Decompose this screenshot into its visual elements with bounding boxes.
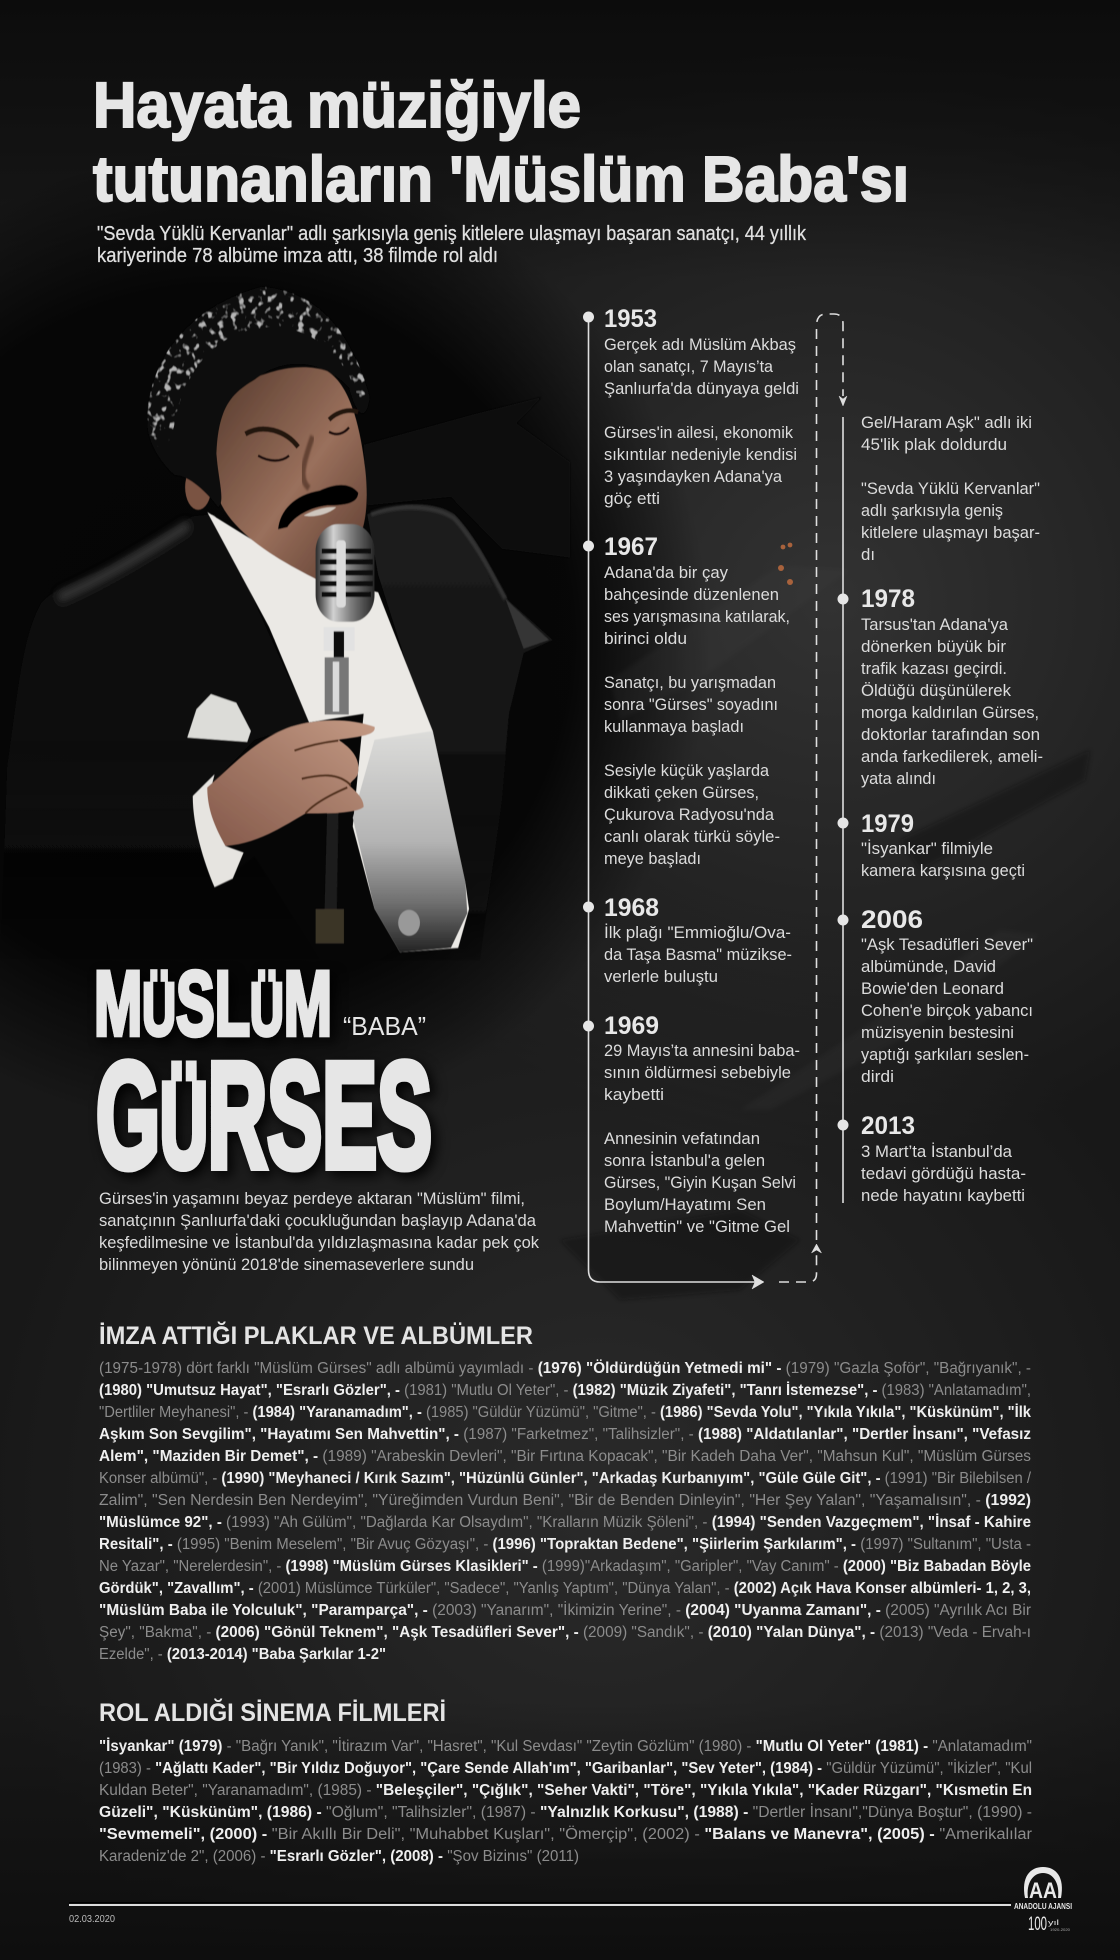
- timeline entry 1967: Çukurova Radyosu'nda: [604, 805, 775, 824]
- subtitle: "Sevda Yüklü Kervanlar" adlı şarkısıyla geniş kitlelere ulaşmayı başaran sanatçı, 44 yıllık: [97, 223, 807, 245]
- Anadolu Ajansı logo: 100: [1028, 1914, 1047, 1935]
- albums text block: (1975-1978) dört farklı "Müslüm Gürses" adlı albümü yayımladı - (1976) "Öldürdüğün Yetmedi mi" - (1979) "Gazla Şoför", "Bağrıyanık", -: [99, 1360, 1031, 1377]
- icon: AA arch: [1024, 1867, 1062, 1898]
- film description: [99, 1189, 539, 1274]
- shirt cuff: [193, 774, 244, 887]
- timeline entry 1979: "İsyankar" filmiyle: [861, 839, 993, 858]
- albums text block: Ezelde", - (2013-2014) "Baba Şarkılar 1-2": [99, 1646, 386, 1663]
- mic stand: [324, 731, 340, 944]
- timeline entry 2006: Cohen'e birçok yabancı: [861, 1001, 1033, 1020]
- timeline entry 2006: yaptığı şarkıları seslen-: [861, 1045, 1029, 1064]
- timeline entry 2006: [838, 906, 1033, 1086]
- timeline entry 1979: 1979: [861, 810, 914, 838]
- timeline entry 2013: [838, 1112, 1026, 1205]
- timeline entry 1969: dı: [861, 545, 875, 564]
- name: Müslüm Baba Gürses: [94, 953, 432, 1199]
- albums text block: "Müslümce 92", - (1993) "Ah Gülüm", "Dağlarda Kar Olsaydım", "Kralların Müzik Şöleni", - (1994) "Senden Vazgeçmem", "İnsaf - Kahire: [99, 1514, 1031, 1531]
- timeline entry 1978: doktorlar tarafından son: [861, 725, 1040, 744]
- timeline entry 2013: 2013: [861, 1112, 915, 1140]
- timeline entry 1969: [583, 413, 1040, 1236]
- title: [93, 69, 909, 215]
- timeline entry 1953: sıkıntılar nedeniyle kendisi: [604, 445, 797, 464]
- timeline entry 2013: tedavi gördüğü hasta-: [861, 1164, 1026, 1183]
- timeline entry 1967: birinci oldu: [604, 629, 687, 648]
- Anadolu Ajansı logo: AA: [1029, 1878, 1057, 1903]
- timeline entry 2013: 3 Mart’ta İstanbul’da: [861, 1142, 1013, 1161]
- timeline entry 1967: bahçesinde düzenlenen: [604, 585, 779, 604]
- ear: [185, 465, 211, 510]
- Anadolu Ajansı logo: [1014, 1867, 1072, 1935]
- timeline entry 1969: 1969: [604, 1012, 659, 1040]
- shirt: [207, 512, 469, 952]
- timeline entry 1968: verlerle buluştu: [604, 967, 718, 986]
- timeline entry 1967: sonra "Gürses" soyadını: [604, 695, 778, 714]
- albums text block: "Müslüm Baba ile Yolculuk", "Paramparça", - (2003) "Yanarım", "İkimizin Yerine", - (2004) "Uyanma Zamanı", - (2005) "Ayrılık Acı Bir: [99, 1601, 1031, 1619]
- albums text block: Şey", "Bakma", - (2006) "Gönül Teknem", "Aşk Tesadüfleri Sever", - (2009) "Sandık", - (2010) "Yalan Dünya", - (2013) "Veda - Ervah-ı: [99, 1624, 1031, 1641]
- timeline entry 1953: 3 yaşındayken Adana'ya: [604, 467, 783, 486]
- timeline entry 1953: [583, 305, 799, 508]
- albums text block: Resitali", - (1995) "Benim Meselem", "Bir Avuç Gözyaşı", - (1996) "Topraktan Bedene", "Şiirlerim Şarkılarım", - (1997) "Sultanım", "Usta -: [99, 1536, 1031, 1553]
- timeline entry 2013: nede hayatını kaybetti: [861, 1186, 1025, 1205]
- films text block: Karadeniz'de 2", (2006) - "Esrarlı Gözler", (2008) - "Şov Bizinıs" (2011): [99, 1848, 579, 1865]
- films text block: Kuldan Beter", "Yaranamadım", (1985) - "Beleşçiler", "Çığlık", "Seher Vakti", "Töre", "Yıkıla Yıkıla", "Kader Rüzgarı", "Kısmetin En: [99, 1782, 1032, 1799]
- timeline entry 1967: canlı olarak türkü söyle-: [604, 827, 780, 846]
- portrait of Müslüm Gürses singing: [0, 287, 570, 960]
- timeline entry 2006: "Aşk Tesadüfleri Sever": [861, 935, 1033, 954]
- timeline entry 1967: kullanmaya başladı: [604, 717, 744, 736]
- timeline entry 1953: olan sanatçı, 7 Mayıs’ta: [604, 357, 774, 376]
- moustache: [278, 485, 358, 529]
- timeline entry 1969: "Sevda Yüklü Kervanlar": [861, 479, 1040, 498]
- albums text block: "Dertliler Meyhanesi", - (1984) "Yaranamadım", - (1985) "Güldür Yüzümü", "Gitme", - (1986) "Sevda Yolu", "Yıkıla Yıkıla", "Küskünüm", "İlk: [99, 1404, 1031, 1421]
- timeline entry 1969: 45'lik plak doldurdu: [861, 435, 1007, 454]
- timeline entry 1969: sının öldürmesi sebebiyle: [604, 1063, 791, 1082]
- Gürses: GÜRSES: [96, 1031, 432, 1199]
- timeline entry 1968: 1968: [604, 894, 659, 922]
- timeline entry 1953: göç etti: [604, 489, 660, 508]
- title: tutunanların 'Müslüm Baba'sı: [93, 143, 909, 215]
- timeline entry 2006: albümünde, David: [861, 957, 996, 976]
- timeline entry 1978: trafik kazası geçirdi.: [861, 659, 1007, 678]
- Baba: “BABA”: [343, 1011, 426, 1041]
- timeline entry 1969: Mahvettin" ve "Gitme Gel: [604, 1217, 790, 1236]
- timeline entry 1969: Annesinin vefatından: [604, 1129, 760, 1148]
- timeline entry 1967: ses yarışmasına katılarak,: [604, 607, 790, 626]
- timeline entry 1978: dönerken büyük bir: [861, 637, 1006, 656]
- timeline entry 1969: 29 Mayıs’ta annesini baba-: [604, 1041, 800, 1060]
- timeline entry 1967: [583, 533, 790, 868]
- film description: bilinmeyen yönünü 2018'de sinemaseverlere sundu: [99, 1255, 474, 1274]
- timeline entry 1967: dikkati çeken Gürses,: [604, 783, 759, 802]
- film description: sanatçının Şanlıurfa'daki çocukluğundan başlayıp Adana'da: [99, 1211, 537, 1230]
- films text block: "Sevmemeli", (2000) - "Bir Akıllı Bir Deli", "Muhabbet Kuşları", "Ömerçip", (2002) - "Balans ve Manevra", (2005) - "Amerikalılar: [99, 1825, 1032, 1843]
- timeline entry 1967: meye başladı: [604, 849, 701, 868]
- subtitle: kariyerinde 78 albüme imza attı, 38 filmde rol aldı: [97, 245, 498, 267]
- face: [214, 367, 367, 579]
- film description: keşfedilmesine ve İstanbul'da yıldızlaşmasına kadar pek çok: [99, 1233, 539, 1252]
- timeline entry 1967: Sanatçı, bu yarışmadan: [604, 673, 776, 692]
- timeline entry 1953: Gürses'in ailesi, ekonomik: [604, 423, 793, 442]
- timeline entry 1953: 1953: [604, 305, 657, 333]
- timeline entry 1978: [838, 585, 1043, 788]
- timeline entry 2006: müzisyenin bestesini: [861, 1023, 1014, 1042]
- Anadolu Ajansı logo: 1920-2020: [1050, 1927, 1071, 1932]
- pocket square: [187, 694, 251, 742]
- timeline entry 2006: dirdi: [861, 1067, 894, 1086]
- Anadolu Ajansı logo: yıl: [1048, 1920, 1060, 1927]
- timeline entry 1978: anda farkedilerek, ameli-: [861, 747, 1043, 766]
- eyebrows and closed eyes: [245, 429, 298, 447]
- timeline entry 1969: kitlelere ulaşmayı başar-: [861, 523, 1040, 542]
- films text block: [99, 1737, 1032, 1865]
- albums text block: Aşkım Son Sevgilim", "Hayatımı Sen Mahvettin", - (1987) "Farketmez", "Talihsizler", - (1988) "Aldatılanlar", "Dertler İnsanı", "Vefasız: [99, 1426, 1031, 1443]
- tie: [353, 731, 467, 952]
- albums text block: Konser albümü", - (1990) "Meyhaneci / Kırık Sazım", "Hüzünlü Günler", "Arkadaş Kurbanıyım", "Güle Güle Git", - (1991) "Bir Bilebilsen /: [99, 1470, 1032, 1487]
- footer rule and date: 02.03.2020: [69, 1913, 115, 1925]
- timeline entry 1969: kaybetti: [604, 1085, 664, 1104]
- timeline entry 1969: Boylum/Hayatımı Sen: [604, 1195, 766, 1214]
- timeline entry 1969: Gel/Haram Aşk" adlı iki: [861, 413, 1032, 432]
- films text block: "İsyankar" (1979) - "Bağrı Yanık", "İtirazım Var", "Hasret", "Kul Sevdası" "Zeytin Gözlüm" (1980) - "Mutlu Ol Yeter" (1981) - "Anlatamadım": [99, 1737, 1032, 1755]
- Müslüm: MÜSLÜM: [94, 953, 332, 1055]
- subtitle: [97, 223, 807, 267]
- shoulder highlight: [62, 527, 185, 597]
- hair: [147, 287, 370, 508]
- jacket right: [367, 504, 553, 960]
- timeline entry 1953: Şanlıurfa'da dünyaya geldi: [604, 379, 799, 398]
- hand: [207, 720, 375, 846]
- timeline entry 1967: Adana'da bir çay: [604, 563, 728, 582]
- jacket left: [0, 514, 320, 960]
- title: Hayata müziğiyle: [93, 69, 581, 141]
- heading: albums: İMZA ATTIĞI PLAKLAR VE ALBÜMLER: [99, 1321, 533, 1350]
- timeline entry 1968: İlk plağı "Emmioğlu/Ova-: [604, 923, 791, 942]
- timeline entry 2006: Bowie'den Leonard: [861, 979, 1004, 998]
- timeline entry 1978: yata alındı: [861, 769, 936, 788]
- films text block: Güzeli", "Küskünüm", (1986) - "Oğlum", "Talihsizler", (1987) - "Yalnızlık Korkusu", (1988) - "Dertler İnsanı","Dünya Boştur", (1990) -: [99, 1803, 1032, 1821]
- timeline entry 1979: kamera karşısına geçti: [861, 861, 1025, 880]
- albums text block: Zalim", "Sen Nerdesin Ben Nerdeyim", "Yüreğimden Vurdun Beni", "Bir de Benden Dinleyin", "Her Şey Yalan", "Yaşamalısın", - (1992): [99, 1492, 1031, 1509]
- timeline connector lines and arrows: [588, 314, 847, 1289]
- albums text block: Alem", "Maziden Bir Demet", - (1989) "Arabeskin Devleri", "Bir Fırtına Kopacak", "Bir Kadeh Daha Ver", "Mahsun Kul", "Müslüm Gürses: [99, 1448, 1031, 1465]
- timeline entry 1968: da Taşa Basma" müzikse-: [604, 945, 792, 964]
- timeline entry 1978: Öldüğü düşünülerek: [861, 681, 1011, 700]
- timeline entry 1967: Sesiyle küçük yaşlarda: [604, 761, 770, 780]
- albums text block: (1980) "Umutsuz Hayat", "Esrarlı Gözler", - (1981) "Mutlu Ol Yeter", - (1982) "Müzik Ziyafeti", "Tanrı İstemezse", - (1983) "Anlatamadım",: [99, 1382, 1031, 1399]
- timeline entry 1967: 1967: [604, 533, 658, 561]
- mic specks: [778, 543, 793, 585]
- timeline entry 1978: morga kaldırılan Gürses,: [861, 703, 1039, 722]
- albums text block: [99, 1360, 1032, 1663]
- timeline entry 1969: sonra İstanbul'a gelen: [604, 1151, 765, 1170]
- microphone head: [316, 524, 375, 622]
- timeline entry 1953: Gerçek adı Müslüm Akbaş: [604, 335, 796, 354]
- timeline entry 1978: 1978: [861, 585, 915, 613]
- albums text block: Ne Yazar", "Nerelerdesin", - (1998) "Müslüm Gürses Klasikleri" - (1999)"Arkadaşım", "Garipler", "Vay Canım" - (2000) "Biz Babadan Böyle: [99, 1558, 1031, 1575]
- film description: Gürses'in yaşamını beyaz perdeye aktaran "Müslüm" filmi,: [99, 1189, 525, 1208]
- timeline entry 1968: [583, 894, 792, 986]
- heading: films: ROL ALDIĞI SİNEMA FİLMLERİ: [99, 1698, 446, 1727]
- albums text block: Gördük", "Zavallım", - (2001) Müslümce Türküler", "Sadece", "Yanlış Yaptım", "Dünya Yalan", - (2002) Açık Hava Konser albümleri- 1, 2, 3,: [99, 1580, 1031, 1597]
- Anadolu Ajansı logo: ANADOLU AJANSI: [1014, 1901, 1072, 1911]
- timeline entry 2006: 2006: [861, 906, 923, 934]
- films text block: (1983) - "Ağlattı Kader", "Bir Yıldız Doğuyor", "Çare Sende Allah'ım", "Garibanlar", "Sev Yeter", (1984) - "Güldür Yüzümü", "İkizler", "Kul: [99, 1759, 1032, 1777]
- timeline entry 1978: Tarsus'tan Adana'ya: [861, 615, 1009, 634]
- timeline entry 1969: adlı şarkısıyla geniş: [861, 501, 1003, 520]
- timeline entry 1969: Gürses, "Giyin Kuşan Selvi: [604, 1173, 796, 1192]
- timeline entry 1979: [838, 810, 1025, 880]
